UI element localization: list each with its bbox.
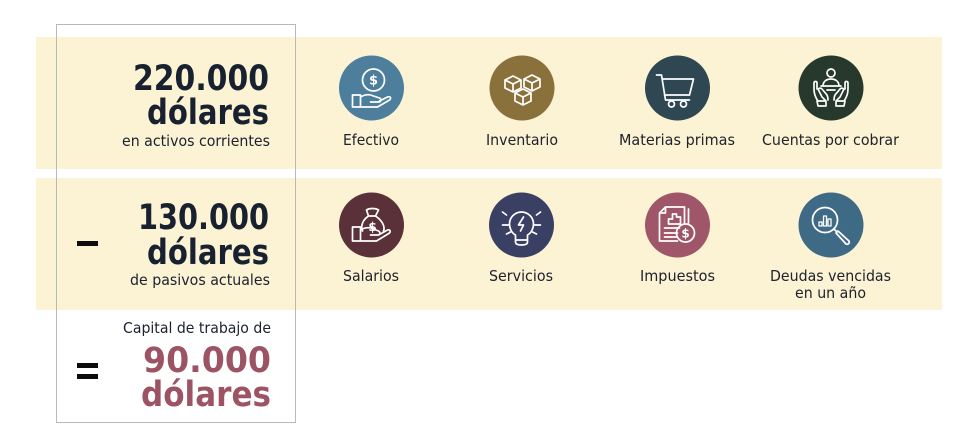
icon: hand holding coin: $ [369, 74, 378, 88]
text block: current liabilities amount: de pasivos actuales [130, 271, 270, 289]
item: Cuentas por cobrar [762, 56, 900, 149]
item: Servicios: Servicios [489, 267, 553, 285]
text block: working capital result: 90.000 [143, 341, 271, 381]
text block: current liabilities amount: dólares [147, 233, 269, 273]
icon: light bulb [489, 192, 554, 258]
icon: tax document with coin: $ [681, 226, 690, 240]
item: Impuestos [640, 192, 715, 285]
icon: magnifying glass with chart [798, 192, 864, 258]
text block: working capital result: dólares [141, 375, 271, 415]
label: Deudas vencidas en un año: en un año [795, 284, 866, 302]
text block: current assets amount: dólares [147, 93, 269, 133]
text block: current assets amount: en activos corrientes [122, 132, 270, 150]
label: Deudas vencidas en un año [770, 267, 891, 302]
icon: hands holding person [798, 56, 864, 120]
item: Efectivo: Efectivo [343, 131, 399, 149]
label: Deudas vencidas en un año: Deudas vencidas [770, 267, 891, 285]
icon: equals sign [77, 363, 98, 379]
item: Deudas vencidas en un año [770, 192, 891, 302]
item: Salarios: Salarios [343, 267, 399, 285]
text block: current assets amount [122, 59, 270, 150]
text block: current liabilities amount [130, 198, 270, 289]
panel: current assets band [36, 37, 942, 169]
icon: minus sign [77, 241, 98, 246]
item: Efectivo [339, 56, 404, 149]
item: Inventario [486, 56, 558, 149]
text block: working capital result [123, 319, 271, 415]
text block: current assets amount: 220.000 [133, 59, 269, 99]
panel: calculation outline box [56, 24, 296, 422]
item: Materias primas: Materias primas [619, 131, 735, 149]
text block: current liabilities amount: 130.000 [138, 198, 269, 238]
text block: working capital result: Capital de trabajo de [123, 319, 271, 337]
item: Materias primas [619, 56, 735, 149]
icon: hand holding money bag: $ [368, 220, 377, 234]
item: Inventario: Inventario [486, 131, 558, 149]
item: Impuestos: Impuestos [640, 267, 715, 285]
item: Cuentas por cobrar: Cuentas por cobrar [762, 131, 900, 149]
item: Salarios [339, 192, 404, 285]
panel: current liabilities band [36, 178, 942, 310]
icon: shopping cart [645, 56, 710, 120]
icon: stacked cubes [490, 56, 554, 120]
item: Servicios [489, 192, 554, 285]
